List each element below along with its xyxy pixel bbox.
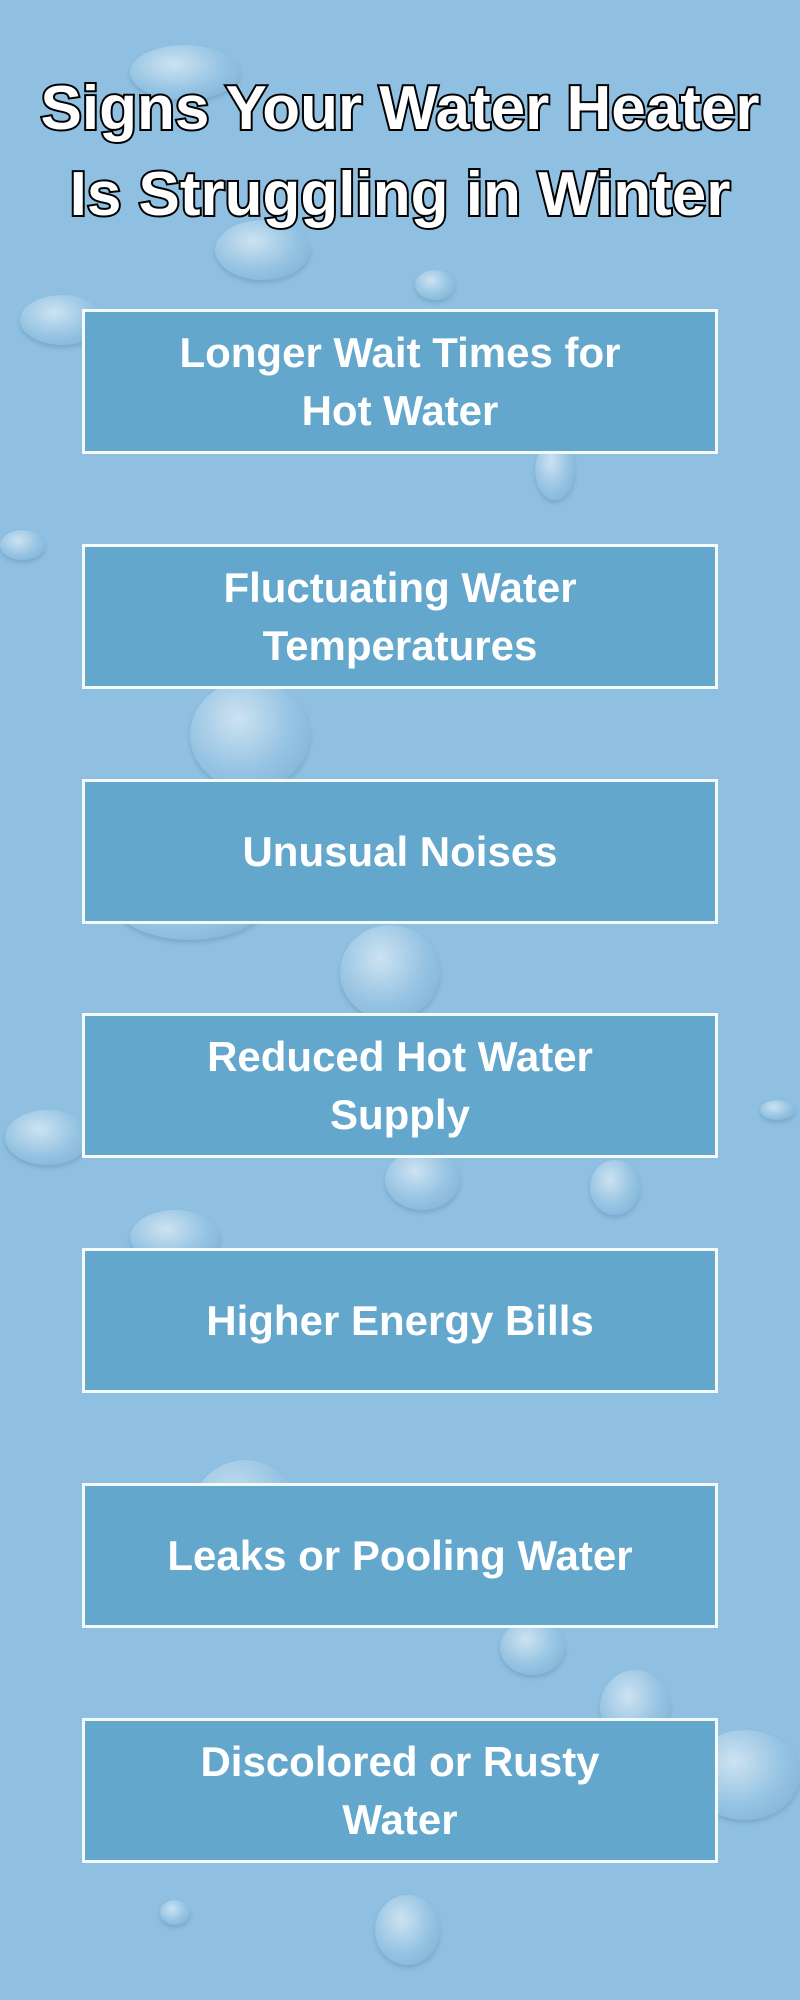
panel: discolored water: Discolored or Rusty [200, 1738, 600, 1784]
panel: leaks [82, 1483, 718, 1628]
panel: reduced supply [82, 1013, 718, 1158]
panel: unusual noises [82, 779, 718, 924]
panel: reduced supply: Supply [330, 1090, 470, 1138]
panel: fluctuating temperatures: Fluctuating Water [223, 564, 577, 610]
panel: fluctuating temperatures: Temperatures [263, 622, 537, 668]
panel: longer wait times [82, 309, 718, 454]
panel: unusual noises: Unusual Noises [242, 828, 558, 874]
panel: reduced supply: Reduced Hot Water [207, 1032, 593, 1080]
title [40, 74, 761, 230]
panel: longer wait times: Longer Wait Times for [179, 328, 621, 376]
title: Signs Your Water Heater [41, 74, 759, 143]
panel: leaks: Leaks or Pooling Water [167, 1532, 633, 1578]
panel: higher energy bills: Higher Energy Bills [206, 1296, 594, 1344]
panel: longer wait times: Hot Water [302, 386, 498, 434]
panel: discolored water: Water [342, 1796, 458, 1842]
panel: fluctuating temperatures [82, 544, 718, 689]
panel: discolored water [82, 1718, 718, 1863]
panel: higher energy bills [82, 1248, 718, 1393]
title: Is Struggling in Winter [70, 160, 730, 229]
